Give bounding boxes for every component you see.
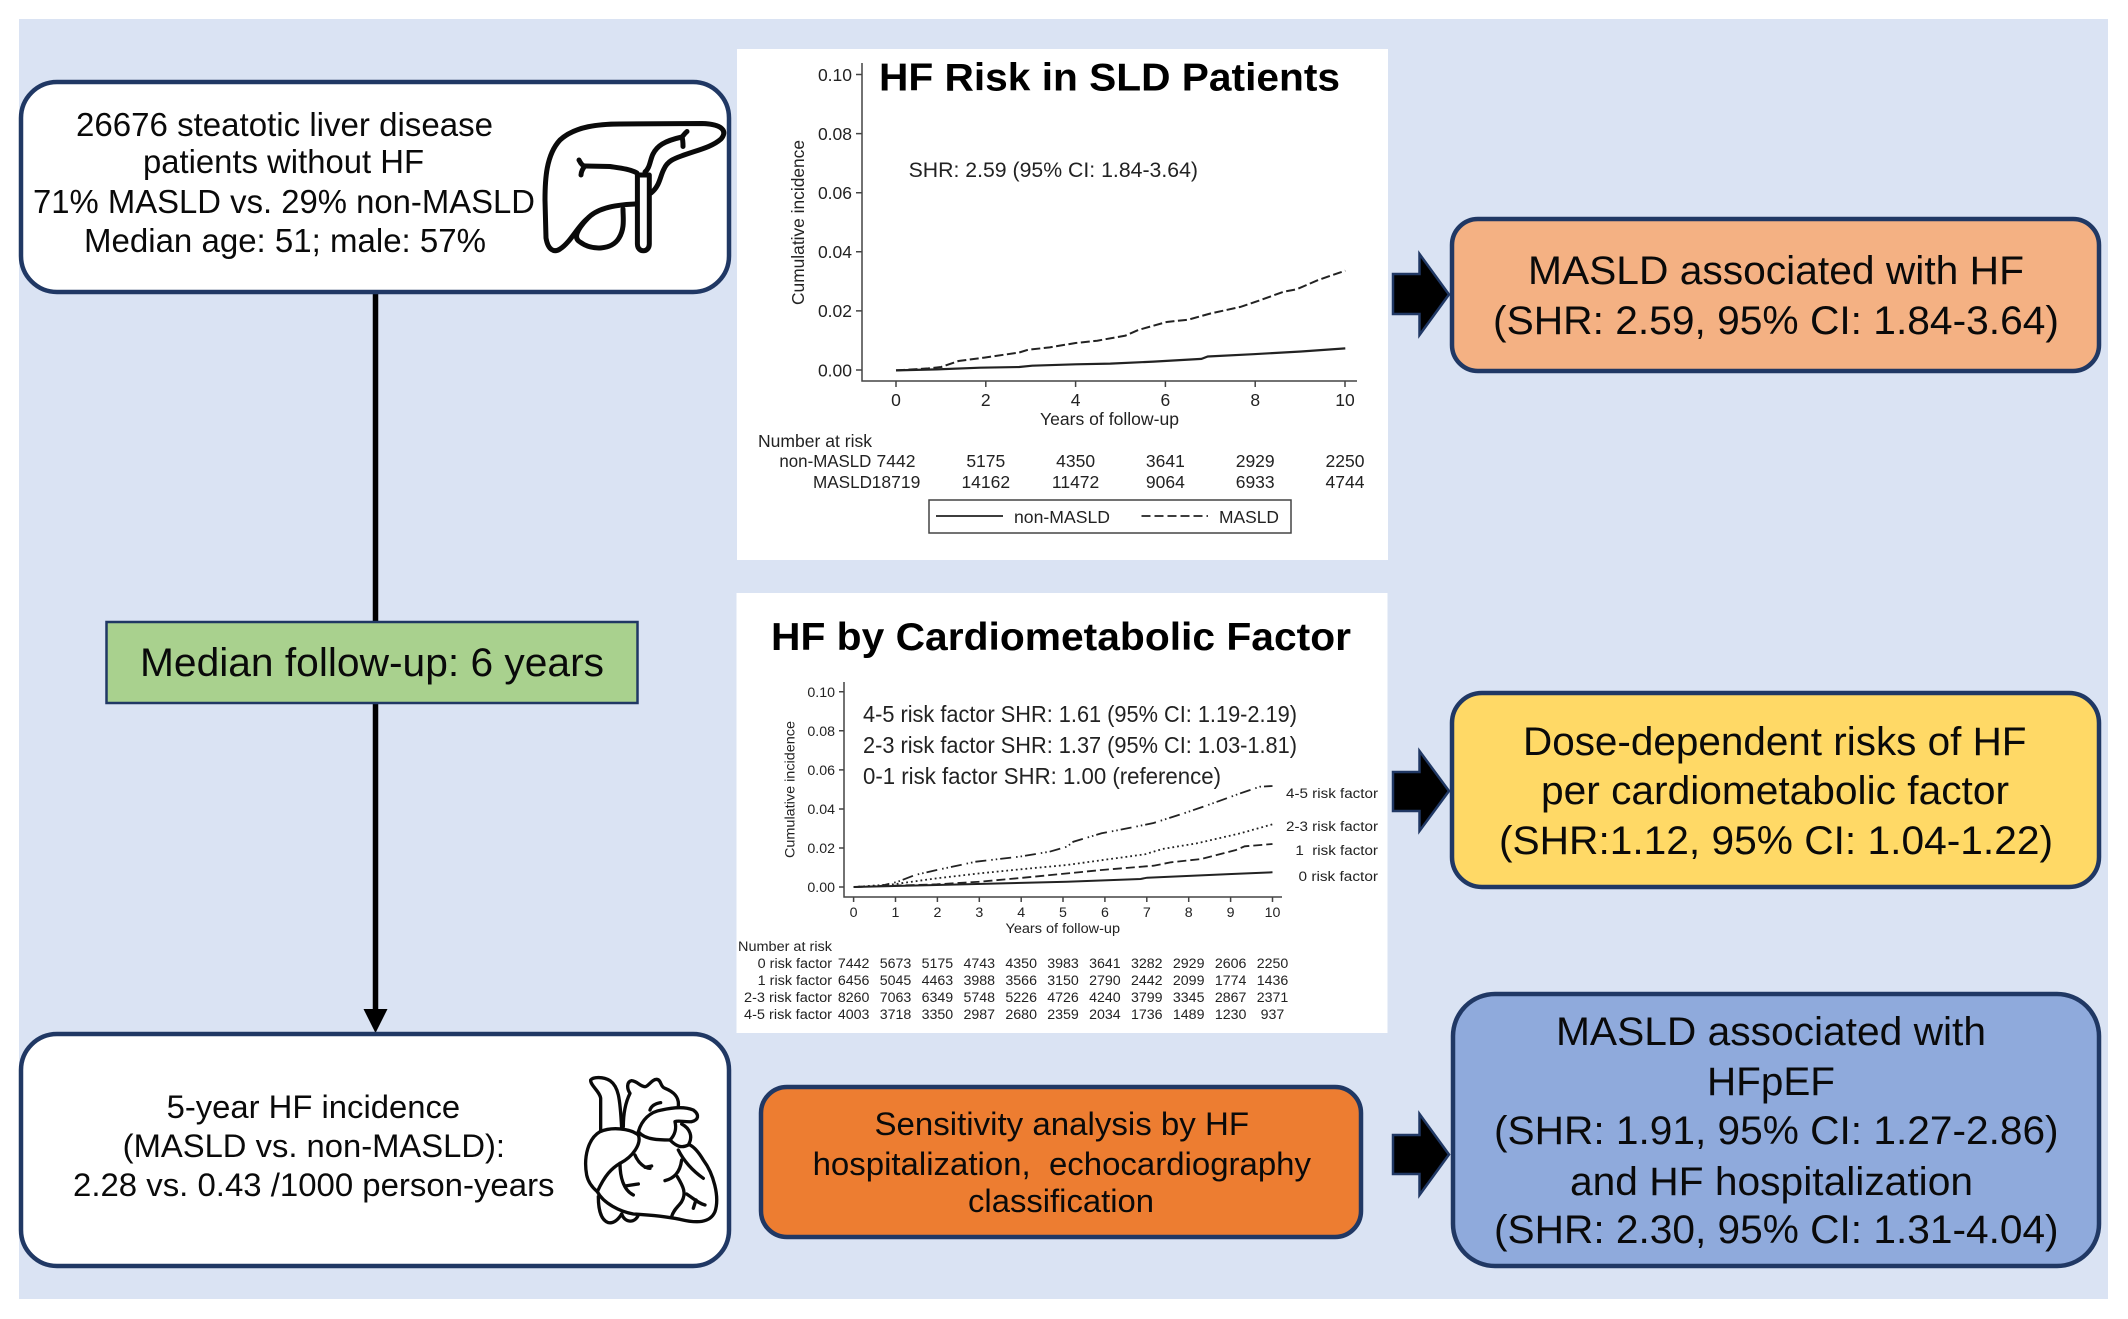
SHR annotations	[863, 701, 1297, 789]
number at risk table: 4726	[1047, 990, 1079, 1006]
number at risk table: 1489	[1173, 1007, 1205, 1023]
curve: 4-5 risk factor	[854, 786, 1272, 887]
y axis title: Cumulative incidence	[788, 140, 808, 305]
number at risk table: Number at risk	[758, 431, 872, 451]
SHR annotations: 4-5 risk factor SHR: 1.61 (95% CI: 1.19-2.19)	[863, 701, 1297, 727]
number at risk table: 3641	[1146, 451, 1185, 471]
number at risk table: 11472	[1052, 472, 1099, 492]
SHR annotations: 2-3 risk factor SHR: 1.37 (95% CI: 1.03-1.81)	[863, 732, 1297, 758]
number at risk table: 3282	[1131, 956, 1163, 972]
cohort text: patients without HF	[143, 143, 424, 180]
box: sensitivity analysis: hospitalization, echocardiography	[813, 1146, 1311, 1182]
x tick labels: 2	[981, 390, 991, 410]
arrow: cardiometabolic to result	[1393, 751, 1449, 831]
x tick labels	[850, 905, 1280, 921]
number at risk table: non-MASLD	[779, 451, 871, 471]
x tick labels: 1	[892, 905, 900, 921]
curve: MASLD	[896, 271, 1345, 370]
number at risk table: 6933	[1236, 472, 1275, 492]
arrow: sensitivity to result	[1393, 1114, 1449, 1195]
y tick labels	[818, 65, 852, 380]
SHR annotation: SHR: 2.59 (95% CI: 1.84-3.64)	[909, 159, 1198, 182]
panel: cohort description	[21, 82, 729, 292]
number at risk table: 7063	[880, 990, 911, 1006]
box: HFpEF and hospitalization results	[1453, 994, 2099, 1266]
box: sensitivity analysis: classification	[968, 1183, 1154, 1219]
number at risk table: 6349	[922, 990, 953, 1006]
y tick labels: 0.02	[818, 301, 852, 321]
curve labels: 4-5 risk factor	[1286, 786, 1378, 802]
x tick labels: 6	[1101, 905, 1109, 921]
legend	[929, 500, 1291, 533]
number at risk table: 937	[1261, 1007, 1284, 1023]
cohort text	[33, 106, 535, 259]
panel: HF risk chart	[737, 49, 1388, 560]
x tick labels: 6	[1161, 390, 1170, 410]
number at risk table: 2250	[1257, 956, 1288, 972]
number at risk table: 2-3 risk factor	[744, 990, 832, 1006]
chart title: HF by Cardiometabolic Factor	[771, 616, 1351, 659]
box: HFpEF and hospitalization results: MASLD associated with	[1556, 1010, 1986, 1054]
curve labels: 1 risk factor	[1295, 843, 1378, 859]
number at risk table: 3983	[1047, 956, 1079, 972]
y tick labels	[807, 685, 835, 896]
number at risk table: 4463	[922, 973, 953, 989]
number at risk table: 3718	[880, 1007, 911, 1023]
number at risk table: 2790	[1089, 973, 1121, 989]
x tick labels: 7	[1143, 905, 1151, 921]
number at risk table: 2250	[1326, 451, 1365, 471]
number at risk table: 2034	[1089, 1007, 1121, 1023]
cohort text: 71% MASLD vs. 29% non-MASLD	[33, 183, 535, 220]
x tick labels: 8	[1185, 905, 1193, 921]
number at risk table: 4350	[1056, 451, 1095, 471]
incidence text: (MASLD vs. non-MASLD):	[123, 1128, 505, 1164]
cohort text: Median age: 51; male: 57%	[84, 222, 486, 259]
curve: 0 risk factor	[854, 872, 1272, 887]
x axis title: Years of follow-up	[1040, 409, 1179, 429]
x tick labels: 10	[1265, 905, 1280, 921]
icon: liver	[545, 124, 724, 251]
box: median follow-up: Median follow-up: 6 years	[140, 641, 604, 685]
box: MASLD associated with HF: MASLD associated with HF	[1528, 249, 2024, 293]
curve labels: 0 risk factor	[1298, 869, 1378, 885]
flow arrow: cohort to incidence	[364, 290, 388, 1033]
number at risk table: 4-5 risk factor	[744, 1007, 832, 1023]
y tick labels: 0.06	[818, 183, 852, 203]
number at risk table: 2442	[1131, 973, 1163, 989]
number at risk table: 5175	[966, 451, 1005, 471]
y tick labels: 0.00	[807, 880, 835, 896]
number at risk table: 2987	[964, 1007, 995, 1023]
box: HFpEF and hospitalization results: and HF hospitalization	[1570, 1160, 1973, 1204]
number at risk table: 0 risk factor	[758, 956, 832, 972]
number at risk table: 3350	[922, 1007, 953, 1023]
number at risk table: 3641	[1089, 956, 1121, 972]
box: MASLD associated with HF: (SHR: 2.59, 95% CI: 1.84-3.64)	[1493, 299, 2059, 343]
y axis title: Cumulative incidence	[782, 721, 798, 858]
number at risk table: 1736	[1131, 1007, 1163, 1023]
number at risk table: 5748	[964, 990, 995, 1006]
SHR annotations: 0-1 risk factor SHR: 1.00 (reference)	[863, 763, 1221, 789]
number at risk table: MASLD	[813, 472, 872, 492]
number at risk table: 8260	[838, 990, 869, 1006]
box: median follow-up	[106, 622, 638, 703]
y tick labels: 0.02	[807, 841, 835, 857]
number at risk table: 7442	[877, 451, 915, 471]
number at risk table: 2359	[1047, 1007, 1079, 1023]
number at risk table: 9064	[1146, 472, 1185, 492]
x tick labels: 4	[1017, 905, 1025, 921]
x tick labels	[891, 390, 1355, 410]
number at risk table: 6456	[838, 973, 869, 989]
x tick labels: 0	[891, 390, 901, 410]
number at risk table: 18719	[872, 472, 920, 492]
box: HFpEF and hospitalization results: (SHR: 1.91, 95% CI: 1.27-2.86)	[1494, 1109, 2059, 1153]
box: dose-dependent risks: per cardiometabolic factor	[1541, 769, 2009, 813]
number at risk table: 2371	[1257, 990, 1288, 1006]
number at risk table: 1774	[1215, 973, 1246, 989]
curve labels: 2-3 risk factor	[1286, 819, 1378, 835]
y tick labels: 0.04	[807, 802, 835, 818]
legend: non-MASLD	[1014, 507, 1110, 527]
y tick labels: 0.04	[818, 242, 852, 262]
box: MASLD associated with HF	[1452, 219, 2099, 371]
y tick labels: 0.06	[807, 763, 835, 779]
box: dose-dependent risks: (SHR:1.12, 95% CI: 1.04-1.22)	[1499, 819, 2053, 863]
y tick labels: 0.08	[807, 724, 835, 740]
number at risk table: 1436	[1257, 973, 1288, 989]
number at risk table: 2099	[1173, 973, 1205, 989]
number at risk table: 4003	[838, 1007, 869, 1023]
number at risk table: 4744	[1326, 472, 1365, 492]
y tick labels: 0.00	[818, 360, 852, 380]
number at risk table: 7442	[838, 956, 869, 972]
axes	[856, 63, 1357, 387]
number at risk table: 5673	[880, 956, 911, 972]
x tick labels: 3	[975, 905, 983, 921]
y tick labels: 0.10	[818, 65, 852, 85]
box: sensitivity analysis: Sensitivity analysis by HF	[874, 1106, 1249, 1142]
curve: non-MASLD	[896, 348, 1345, 370]
number at risk table: 1230	[1215, 1007, 1246, 1023]
cohort text: 26676 steatotic liver disease	[76, 106, 493, 143]
number at risk table: 5226	[1005, 990, 1037, 1006]
x tick labels: 9	[1227, 905, 1235, 921]
box: dose-dependent risks: Dose-dependent risks of HF	[1523, 720, 2026, 764]
x tick labels: 4	[1071, 390, 1081, 410]
x tick labels: 5	[1059, 905, 1067, 921]
incidence text	[73, 1089, 554, 1203]
x tick labels: 10	[1335, 390, 1355, 410]
number at risk table: 3799	[1131, 990, 1163, 1006]
curve: 1 risk factor	[854, 844, 1272, 887]
number at risk table: 3345	[1173, 990, 1205, 1006]
curve labels	[1286, 786, 1378, 885]
panel: cardiometabolic chart	[736, 593, 1388, 1033]
incidence text: 5-year HF incidence	[167, 1089, 460, 1125]
y tick labels: 0.10	[807, 685, 835, 701]
axes	[839, 682, 1282, 902]
number at risk table: 4743	[964, 956, 995, 972]
box: HFpEF and hospitalization results: (SHR: 2.30, 95% CI: 1.31-4.04)	[1494, 1208, 2059, 1252]
number at risk table: 2929	[1173, 956, 1205, 972]
legend: MASLD	[1219, 507, 1279, 527]
number at risk table	[738, 939, 1288, 1023]
icon: heart	[586, 1078, 717, 1223]
number at risk table: 1 risk factor	[758, 973, 832, 989]
number at risk table: 2867	[1215, 990, 1246, 1006]
number at risk table: 2680	[1005, 1007, 1037, 1023]
box: HFpEF and hospitalization results: HFpEF	[1707, 1060, 1835, 1104]
arrow: HF risk to result	[1393, 254, 1449, 335]
number at risk table	[758, 431, 1365, 492]
x tick labels: 2	[933, 905, 941, 921]
chart title: HF Risk in SLD Patients	[879, 56, 1340, 100]
box: sensitivity analysis	[761, 1087, 1361, 1237]
number at risk table: 4350	[1005, 956, 1037, 972]
number at risk table: 2929	[1236, 451, 1275, 471]
number at risk table: 2606	[1215, 956, 1246, 972]
panel: 5-year incidence	[21, 1034, 729, 1266]
number at risk table: 5175	[922, 956, 953, 972]
box: dose-dependent risks	[1452, 693, 2099, 887]
incidence text: 2.28 vs. 0.43 /1000 person-years	[73, 1167, 554, 1203]
x tick labels: 0	[850, 905, 858, 921]
x axis title: Years of follow-up	[1006, 921, 1120, 937]
curve: 2-3 risk factor	[854, 824, 1272, 887]
number at risk table: 14162	[961, 472, 1010, 492]
number at risk table: 3988	[964, 973, 995, 989]
number at risk table: 3566	[1005, 973, 1037, 989]
number at risk table: 5045	[880, 973, 911, 989]
y tick labels: 0.08	[818, 124, 852, 144]
x tick labels: 8	[1250, 390, 1260, 410]
number at risk table: Number at risk	[738, 939, 833, 955]
number at risk table: 3150	[1047, 973, 1079, 989]
number at risk table: 4240	[1089, 990, 1121, 1006]
